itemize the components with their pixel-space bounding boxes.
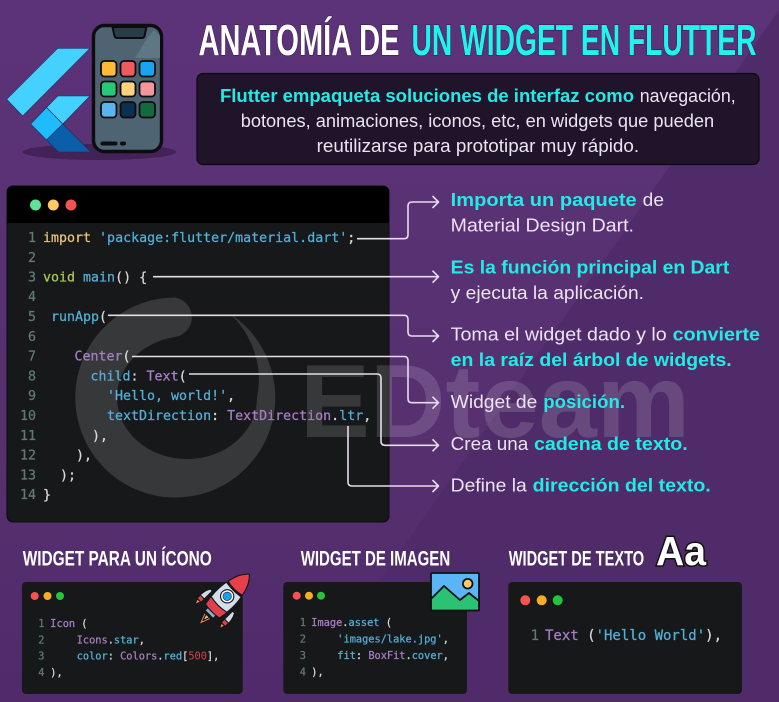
code listing: 4	[38, 667, 44, 679]
window buttons	[293, 592, 325, 600]
window buttons	[30, 200, 76, 210]
intro text box	[197, 74, 759, 164]
code listing: 8	[28, 370, 36, 384]
intro text box: reutilizarse para prototipar muy rápido.	[317, 135, 639, 156]
code listing: );	[60, 468, 76, 484]
icon: phone	[94, 26, 162, 152]
code listing: 9	[28, 389, 36, 404]
callout: importa un paquete: de	[643, 189, 664, 210]
panel: main code window	[7, 186, 690, 522]
callout: cadena de texto: Crea una	[451, 433, 529, 454]
code listing: 1	[28, 231, 36, 246]
code listing: fit: BoxFit.cover,	[337, 650, 449, 662]
code listing: 4	[300, 666, 306, 678]
callout: importa un paquete: Importa un paquete	[451, 189, 637, 210]
callout: dirección del texto: Define la	[451, 475, 527, 496]
icon: Flutter logo	[7, 48, 91, 152]
callout: widget de posición	[451, 391, 625, 412]
title: ANATOMÍA DE	[198, 15, 400, 65]
code listing	[20, 231, 371, 503]
code listing: 2	[38, 634, 44, 646]
icon: landscape image	[431, 573, 479, 610]
code listing: 14	[20, 488, 36, 503]
code listing: 1	[531, 628, 539, 644]
code listing: 'Hello, world!',	[107, 389, 235, 404]
callout: raíz del árbol	[451, 324, 760, 370]
code listing: Center(	[74, 350, 131, 364]
heading: widget de imagen: WIDGET DE IMAGEN	[301, 547, 450, 571]
icon: rocket	[185, 560, 264, 639]
code listing: 2	[300, 634, 306, 646]
code listing: Icons.star,	[77, 634, 145, 646]
code listing: Image.asset (	[311, 617, 392, 629]
window buttons	[520, 595, 563, 605]
code listing	[300, 617, 449, 678]
callout: widget de posición: posición.	[543, 391, 625, 412]
arrow: runApp	[108, 315, 438, 342]
callout: dirección del texto	[451, 475, 711, 496]
panel: icon widget code	[22, 582, 243, 694]
arrow: Center	[132, 356, 438, 409]
code listing: 2	[28, 251, 36, 266]
watermark: EDteam	[75, 298, 690, 497]
intro text box: Flutter empaqueta soluciones de interfaz como	[220, 85, 634, 106]
heading: widget de texto: WIDGET DE TEXTO	[509, 547, 644, 571]
panel: text widget code	[508, 582, 742, 694]
arrow: main	[153, 271, 438, 283]
intro text box: botones, animaciones, iconos, etc, en widgets que pueden	[241, 110, 714, 131]
code listing: import 'package:flutter/material.dart';	[43, 231, 355, 246]
panel: image widget code	[283, 582, 467, 694]
code listing: 5	[28, 310, 36, 325]
code listing: 4	[28, 290, 36, 305]
code listing	[38, 618, 219, 679]
callout: cadena de texto	[451, 433, 688, 454]
code listing: 'images/lake.jpg',	[337, 634, 449, 646]
code listing: Icon (	[50, 618, 88, 630]
watermark: EDteam: EDteam	[300, 344, 690, 460]
logo: Flutter and phone	[7, 26, 177, 160]
code listing: 6	[28, 330, 36, 345]
callout: importa un paquete: Material Design Dart.	[451, 215, 634, 236]
code listing: ),	[92, 429, 108, 444]
callout: dirección del texto: dirección del texto.	[533, 475, 711, 496]
code listing: }	[43, 488, 51, 503]
code listing: 1	[300, 617, 306, 629]
code listing: 12	[20, 448, 36, 464]
code listing: ),	[311, 666, 324, 678]
code listing: ),	[76, 448, 92, 464]
window buttons	[31, 592, 64, 600]
code listing: 7	[28, 350, 36, 364]
code listing: 13	[20, 468, 36, 484]
code listing: 3	[28, 270, 36, 286]
code listing: 11	[20, 429, 36, 444]
code listing: ),	[50, 667, 63, 679]
code listing: 1	[38, 618, 44, 630]
callout: función principal: Es la función principal en Dart	[451, 256, 729, 277]
arrow: Text	[189, 374, 438, 451]
callout: función principal: y ejecuta la aplicación.	[451, 282, 644, 303]
code listing: 3	[38, 651, 44, 663]
code listing: 3	[300, 650, 306, 662]
callout: función principal	[451, 256, 729, 303]
code listing: color: Colors.red[500],	[77, 651, 219, 663]
code listing: Text ('Hello World'),	[545, 628, 722, 644]
icon: Aa: Aa	[656, 528, 707, 574]
code listing: 10	[20, 409, 36, 424]
arrow: import	[357, 196, 438, 239]
heading: widget para un ícono: WIDGET PARA UN ÍCONO	[23, 546, 212, 571]
code listing: runApp(	[51, 310, 107, 325]
callout: raíz del árbol: en la raíz del árbol de widgets.	[451, 349, 732, 370]
arrow: ltr	[348, 426, 438, 492]
callout: cadena de texto: cadena de texto.	[534, 433, 688, 454]
code listing: child: Text(	[90, 370, 187, 384]
callout: raíz del árbol: convierte	[673, 324, 760, 345]
callout: raíz del árbol: Toma el widget dado y lo	[451, 324, 667, 345]
title	[198, 15, 756, 65]
code listing: void main() {	[43, 270, 147, 286]
intro text box: navegación,	[640, 85, 736, 106]
callout: widget de posición: Widget de	[451, 391, 537, 412]
code listing: textDirection: TextDirection.ltr,	[107, 409, 371, 424]
callout: importa un paquete	[451, 189, 664, 236]
